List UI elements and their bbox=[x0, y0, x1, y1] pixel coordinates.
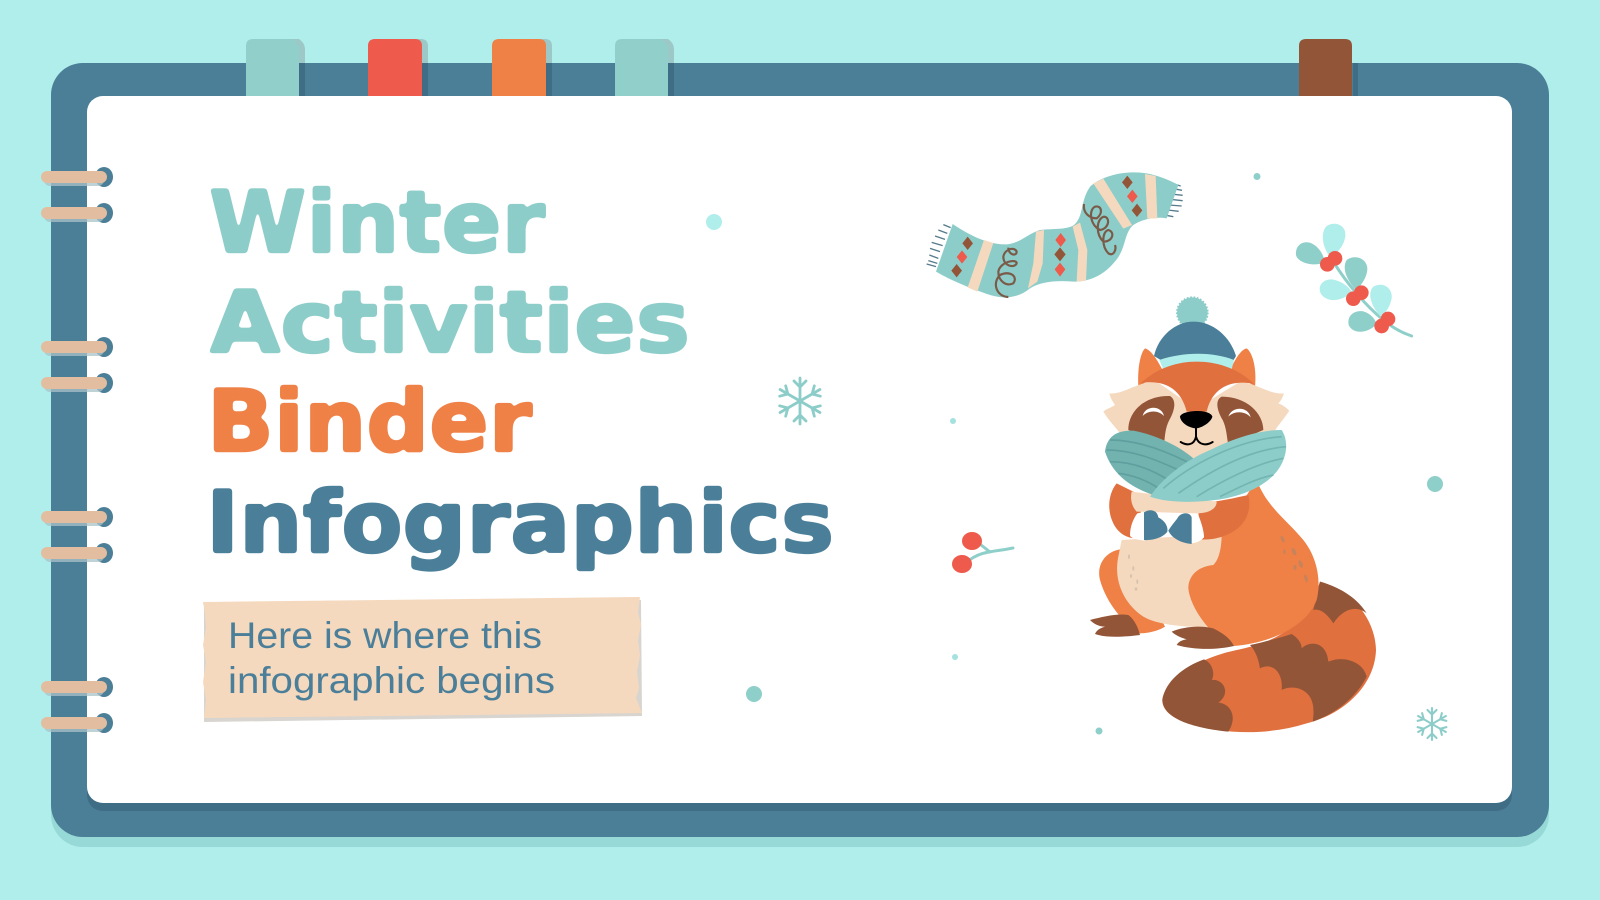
decorative dots bbox=[706, 173, 1443, 734]
raccoon tail bbox=[1162, 582, 1376, 732]
subtitle text: Here is where this bbox=[228, 615, 542, 656]
raccoon body bbox=[1188, 480, 1319, 646]
raccoon belly bbox=[1117, 533, 1230, 627]
binder rings bbox=[41, 167, 113, 733]
title: Activities bbox=[210, 273, 690, 373]
raccoon mittens bbox=[1130, 492, 1217, 544]
raccoon left leg bbox=[1099, 547, 1165, 633]
raccoon hat bbox=[1154, 322, 1236, 369]
icon: snowflake large bbox=[777, 378, 823, 424]
subtitle text: infographic begins bbox=[228, 660, 555, 701]
subtitle tape bbox=[203, 597, 642, 722]
icon: small berries bbox=[952, 532, 1013, 573]
title: Infographics bbox=[206, 473, 834, 573]
raccoon ears bbox=[1138, 348, 1255, 387]
illustration: striped scarf bbox=[927, 172, 1183, 297]
raccoon neck scarf bbox=[1105, 430, 1286, 502]
notebook page bbox=[87, 96, 1512, 811]
title: Binder bbox=[207, 372, 533, 472]
raccoon feet bbox=[1090, 615, 1234, 649]
raccoon hat pom-pom bbox=[1177, 297, 1208, 328]
illustration: raccoon bbox=[1090, 297, 1376, 732]
illustration: winter sprig bbox=[1296, 224, 1412, 336]
icon: snowflake small bbox=[1416, 708, 1448, 740]
title bbox=[206, 173, 834, 573]
binder tabs bbox=[246, 39, 1358, 96]
subtitle text bbox=[228, 615, 555, 701]
title: Winter bbox=[209, 173, 546, 273]
raccoon head bbox=[1103, 362, 1289, 460]
raccoon fur marks bbox=[1280, 535, 1309, 583]
raccoon arms bbox=[1109, 483, 1249, 539]
